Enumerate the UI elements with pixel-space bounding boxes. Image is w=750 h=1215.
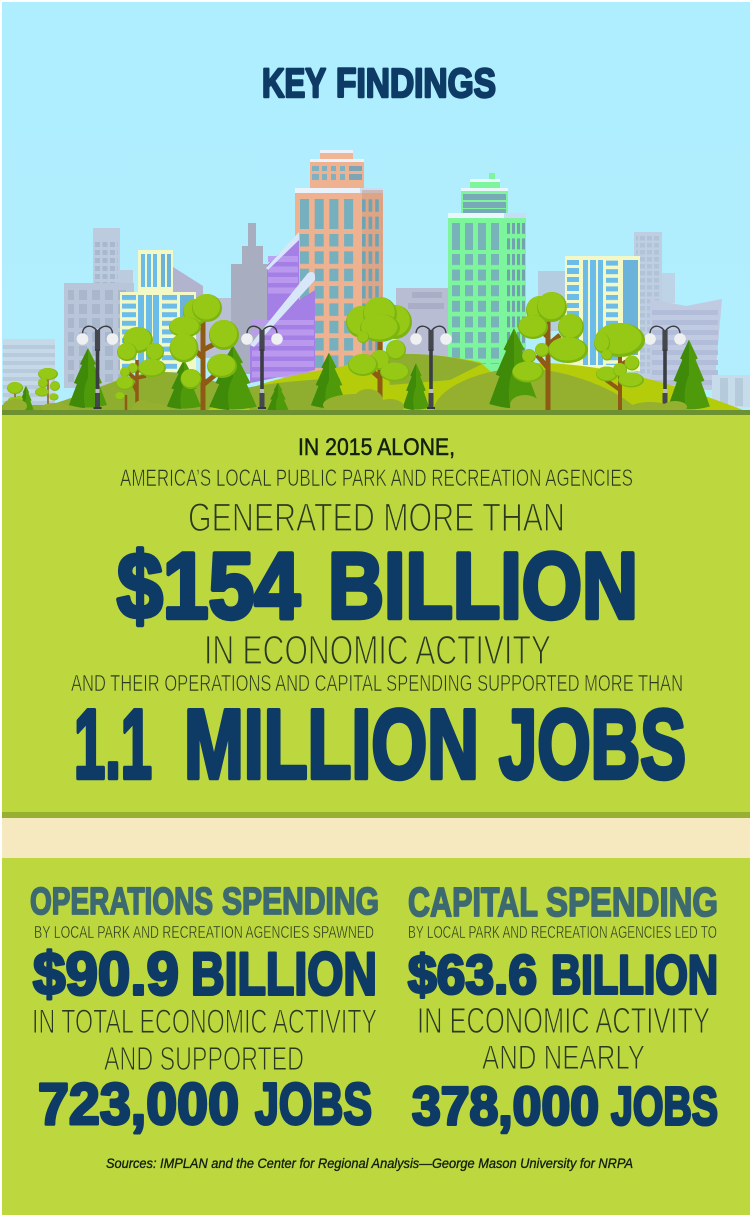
154 billion figure: BILLION [328, 533, 638, 638]
154 billion figure [117, 533, 638, 638]
1.1 million jobs figure: MILLION [184, 689, 479, 799]
operations spending column [30, 881, 379, 1137]
723,000 jobs figure: 723,000 [38, 1072, 239, 1137]
pine trees [69, 328, 710, 411]
capital heading [408, 879, 718, 925]
leafy tree B [169, 294, 239, 411]
sky [2, 2, 750, 412]
title: KEY [262, 60, 326, 106]
economic activity line: IN ECONOMIC ACTIVITY [204, 627, 551, 673]
378,000 jobs figure: 378,000 [412, 1076, 599, 1136]
and supported: AND SUPPORTED [104, 1040, 304, 1077]
salmon tower [295, 150, 383, 380]
90.9 billion figure: $90.9 [33, 940, 179, 1008]
small trees far left [7, 368, 69, 413]
63.6 billion figure: $63.6 [408, 944, 537, 1006]
154 billion figure: $154 [117, 533, 300, 638]
total economic activity: IN TOTAL ECONOMIC ACTIVITY [32, 1003, 377, 1041]
operations heading: OPERATIONS [30, 881, 213, 923]
lamp posts [77, 326, 686, 409]
leafy tree C [346, 297, 412, 411]
operations subheading: BY LOCAL PARK AND RECREATION AGENCIES SPAWNED [34, 922, 374, 942]
ground strip [2, 410, 750, 415]
1.1 million jobs figure: 1.1 [74, 689, 152, 799]
1.1 million jobs figure [74, 689, 686, 799]
378,000 jobs figure [412, 1076, 718, 1136]
intro line: IN 2015 ALONE, [298, 434, 455, 461]
background buildings right [634, 232, 750, 407]
title: FINDINGS [336, 60, 496, 106]
divider band [2, 812, 750, 818]
sources note: Sources: IMPLAN and the Center for Regional Analysis—George Mason University for NRPA [106, 1155, 633, 1171]
cream strip [2, 818, 750, 858]
leafy tree D [512, 292, 588, 411]
shrubs [3, 389, 687, 416]
generated more than: GENERATED MORE THAN [188, 496, 565, 540]
yellow building left [120, 250, 196, 372]
yellow building right [565, 256, 640, 371]
723,000 jobs figure: JOBS [255, 1072, 372, 1137]
63.6 billion figure [408, 944, 718, 1006]
90.9 billion figure: BILLION [191, 940, 377, 1008]
mid background buildings [396, 271, 566, 368]
operations heading: SPENDING [222, 881, 379, 923]
lower green panel [2, 858, 750, 1215]
leafy tree A [115, 327, 166, 411]
headline statistics text [71, 434, 686, 799]
90.9 billion figure [33, 940, 377, 1008]
purple glass building [250, 232, 315, 383]
grey spire building [231, 223, 267, 374]
leafy tree E [594, 323, 645, 411]
main green panel [2, 415, 750, 812]
723,000 jobs figure [38, 1072, 372, 1137]
green tower [448, 173, 526, 374]
hills [2, 354, 748, 412]
capital spending column [408, 879, 718, 1136]
and nearly: AND NEARLY [482, 1039, 645, 1077]
capital heading: CAPITAL [408, 879, 538, 925]
background buildings left [3, 228, 231, 407]
skyline illustration [2, 150, 750, 416]
title [262, 60, 496, 106]
